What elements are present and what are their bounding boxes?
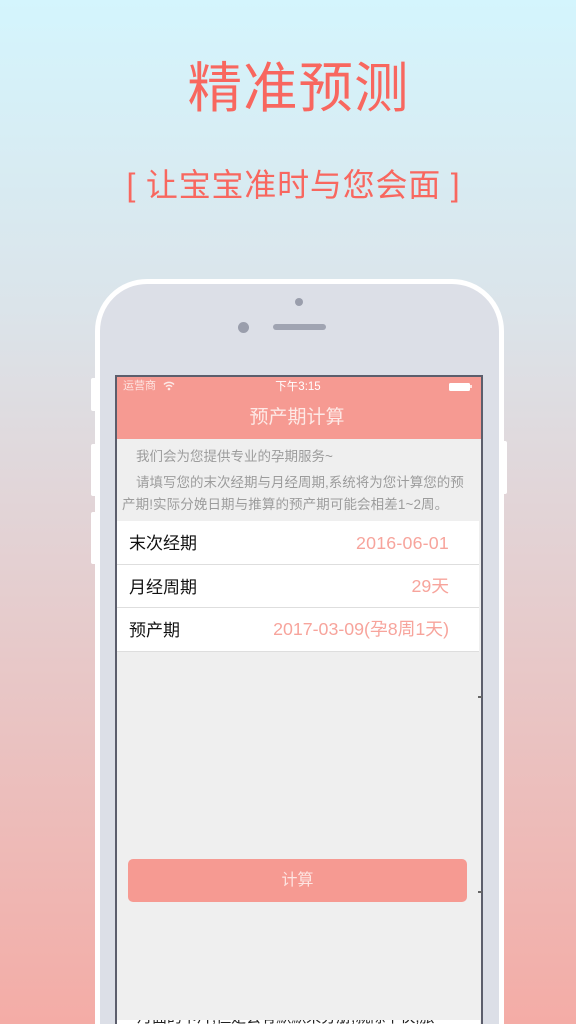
header title: 预产期计算 — [249, 407, 344, 428]
icon: phone mockup — [91, 279, 507, 1024]
phone side button: volume up — [91, 444, 97, 496]
row: cycle: 月经周期 — [129, 578, 197, 597]
phone side button: volume down — [91, 512, 97, 564]
intro text: 产期!实际分娩日期与推算的预产期可能会相差1~2周。 — [122, 497, 448, 512]
icon: battery — [449, 383, 470, 391]
status carrier: 运营商 — [123, 380, 156, 392]
calculate button: 计算 — [281, 872, 314, 889]
intro text: 我们会为您提供专业的孕期服务~ — [136, 449, 333, 464]
tick mark — [478, 891, 482, 893]
phone side button: mute — [91, 378, 97, 411]
subtitle: [ 让宝宝准时与您会面 ] — [127, 167, 460, 203]
row: due date — [117, 608, 479, 652]
phone side button: power — [502, 441, 507, 494]
battery nub — [470, 385, 472, 388]
row: cycle: 29天 — [411, 576, 449, 596]
icon: speaker — [273, 324, 326, 330]
row: due date: 2017-03-09(孕8周1天) — [273, 619, 449, 639]
icon: front sensor — [238, 322, 249, 333]
panel: app screen — [115, 375, 483, 1024]
row: due date: 预产期 — [129, 621, 180, 640]
tick mark — [478, 696, 482, 698]
phone body — [95, 279, 504, 1024]
app header bar — [117, 377, 481, 439]
row: cycle — [117, 565, 479, 608]
calculate button — [128, 859, 467, 902]
intro text — [122, 449, 464, 512]
title: 精准预测 — [187, 58, 410, 119]
intro text: 请填写您的末次经期与月经周期,系统将为您计算您的预 — [136, 475, 464, 490]
icon: camera dot — [295, 298, 303, 306]
row: last period: 2016-06-01 — [356, 533, 449, 553]
status time: 下午3:15 — [275, 381, 321, 393]
row: last period: 末次经期 — [129, 534, 197, 553]
row: last period — [117, 521, 479, 565]
icon: wifi — [164, 382, 174, 390]
